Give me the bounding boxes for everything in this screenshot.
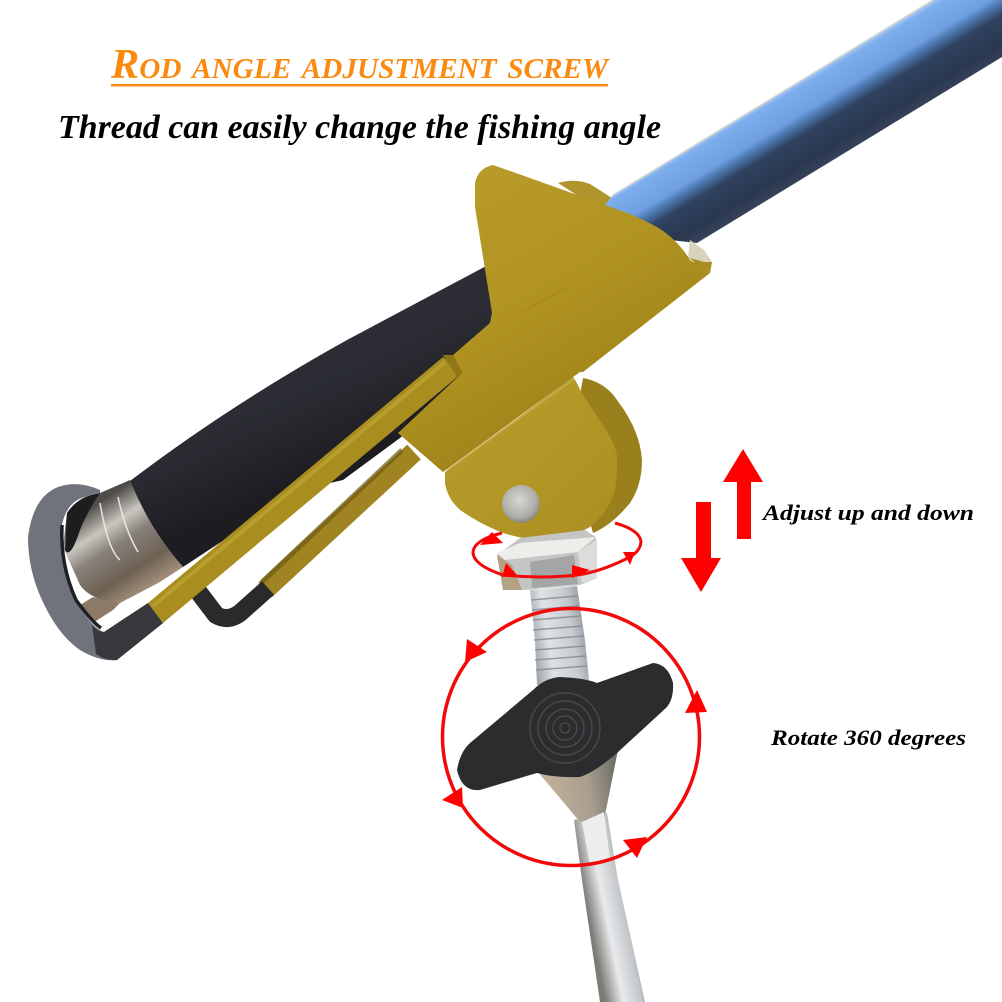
label: rotate 360 degrees: Rotate 360 degrees — [770, 725, 966, 750]
chrome butt cap — [63, 480, 183, 623]
subtitle: Thread can easily change the fishing angle — [58, 109, 661, 146]
pivot bracket back plate — [570, 378, 642, 533]
lower clip rod with black tip — [197, 450, 414, 618]
red swivel ellipse with arrows — [473, 523, 641, 578]
pivot bracket front plate — [445, 377, 617, 540]
blue fishing rod — [605, 0, 1002, 243]
rivet — [502, 485, 540, 523]
gold rod holder body — [398, 165, 712, 472]
label: adjust up and down: Adjust up and down — [761, 500, 974, 525]
rear rim of holder — [558, 181, 612, 210]
holder inner lip — [688, 240, 712, 270]
title: Rod angle adjustment screw — [110, 42, 610, 88]
butt ring handle — [28, 484, 163, 660]
arrow: down — [681, 502, 721, 592]
threaded screw — [530, 586, 589, 685]
red rotation circle with arrows — [442, 608, 707, 866]
gold clip bar — [148, 357, 462, 623]
hex nut — [497, 530, 597, 590]
arrow: up — [723, 449, 763, 539]
steel spike — [538, 750, 645, 1002]
wing nut knob — [457, 663, 673, 790]
foam grip — [130, 264, 500, 567]
